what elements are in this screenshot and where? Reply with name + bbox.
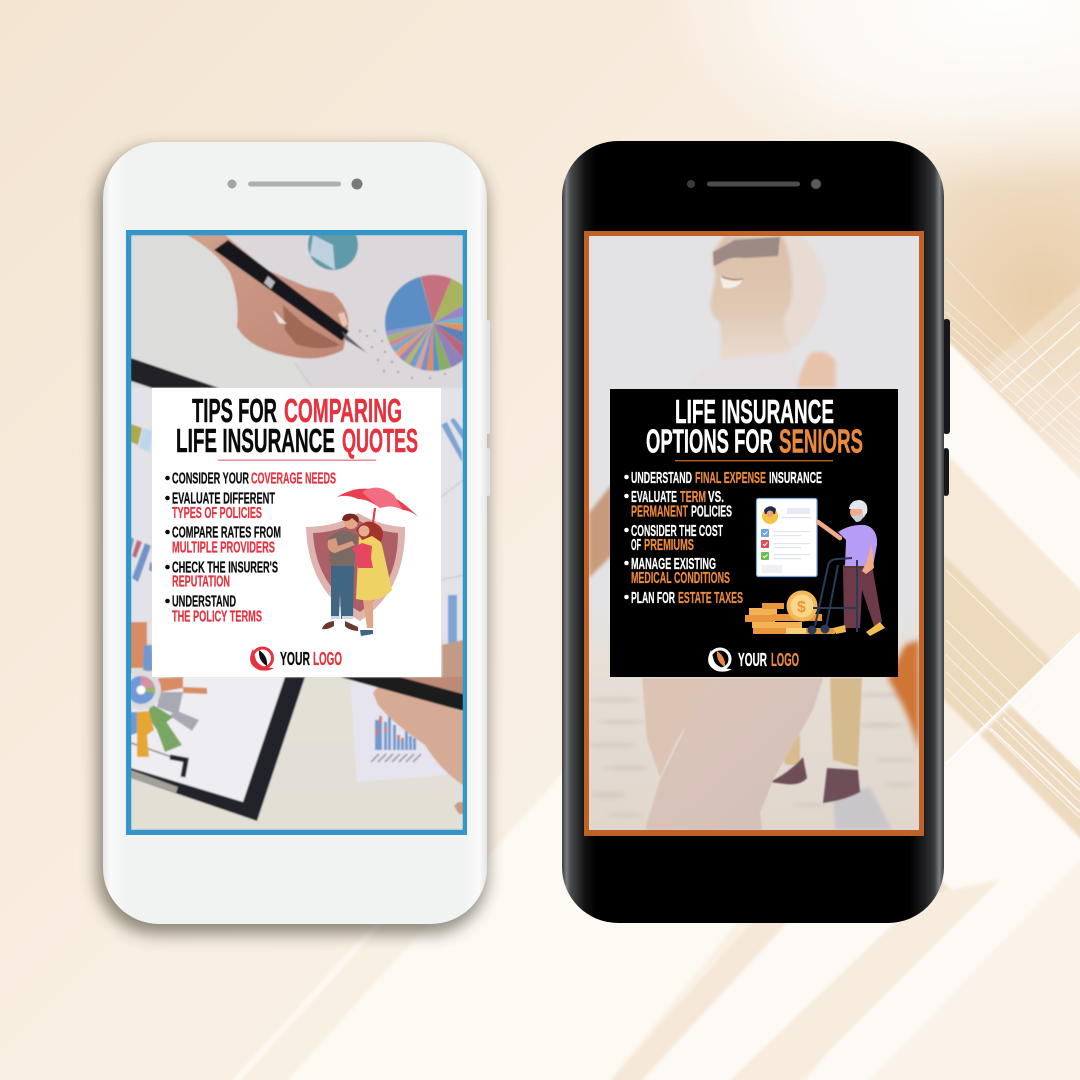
- options list: MEDICAL CONDITIONS: [631, 570, 730, 587]
- sunburst radial chart: [131, 644, 208, 758]
- tips list: THE POLICY TERMS: [172, 608, 262, 626]
- illustration: senior with walker, checklist and coins: [745, 498, 885, 636]
- logo: LOGO: [771, 650, 799, 670]
- small teal pie chart: [307, 235, 359, 271]
- options list: PLAN FOR: [631, 590, 675, 607]
- title: LIFE INSURANCE: [675, 393, 834, 430]
- title: [646, 393, 863, 460]
- card: seniors options: [610, 389, 898, 677]
- phone body: [562, 141, 944, 923]
- side buttons: [486, 320, 490, 496]
- orange blurred sleeve: [888, 640, 919, 752]
- options list: ESTATE TAXES: [678, 590, 743, 607]
- walking frame: [808, 558, 857, 634]
- options list: TERM: [680, 489, 706, 506]
- options list: PERMANENT: [631, 504, 688, 520]
- options list: EVALUATE: [631, 489, 677, 506]
- title: [176, 392, 418, 459]
- tips list: CONSIDER YOUR: [172, 470, 249, 488]
- side buttons: [943, 319, 950, 496]
- tips list: [165, 470, 336, 626]
- second hand with pen: [340, 640, 463, 814]
- photo: desk with charts and hands: [121, 220, 467, 830]
- senior man: [818, 500, 885, 636]
- front camera and speaker: [687, 179, 821, 189]
- coins: $: [797, 599, 806, 616]
- title: COMPARING: [284, 392, 402, 429]
- phone: white mockup: [97, 141, 950, 934]
- tips list: COVERAGE NEEDS: [251, 470, 336, 488]
- senior woman: head, hair and sunglasses: [709, 236, 838, 389]
- title: QUOTES: [342, 422, 418, 459]
- options list: UNDERSTAND: [631, 470, 692, 487]
- options list: PREMIUMS: [644, 537, 694, 554]
- options list: FINAL EXPENSE: [695, 470, 766, 487]
- title: LIFE INSURANCE: [176, 422, 335, 459]
- title: SENIORS: [779, 422, 863, 460]
- large multicolour pie chart: [399, 289, 467, 357]
- checklist card: [756, 498, 817, 576]
- options list: POLICIES: [691, 504, 732, 520]
- sheet with bar chart: [350, 677, 447, 782]
- right strip chart fragments: [441, 418, 463, 645]
- tips list: CHECK THE INSURER'S: [172, 560, 278, 576]
- illustration: family under umbrella and shield: [306, 488, 423, 636]
- logo: YOUR: [738, 650, 767, 670]
- tips list: MULTIPLE PROVIDERS: [172, 540, 275, 556]
- phone: black mockup: [562, 141, 950, 923]
- tips list: COMPARE RATES FROM: [172, 524, 281, 542]
- sand ripples: [592, 693, 910, 816]
- phone shadow: [97, 148, 487, 934]
- tips list: UNDERSTAND: [172, 594, 236, 610]
- options list: CONSIDER THE COST: [631, 523, 723, 540]
- phone body: [103, 142, 487, 924]
- title: TIPS FOR: [192, 392, 277, 429]
- options list: VS.: [708, 489, 724, 506]
- dotted chart labels: [359, 330, 446, 379]
- options list: MANAGE EXISTING: [631, 556, 716, 573]
- title: OPTIONS FOR: [646, 422, 773, 460]
- logo: [250, 648, 342, 671]
- options list: OF: [631, 537, 641, 554]
- hand holding pen: [187, 235, 367, 358]
- arm left of card: [589, 484, 612, 578]
- photo: seniors on the beach: [588, 236, 919, 830]
- tips list: TYPES OF POLICIES: [172, 505, 262, 522]
- options list: INSURANCE: [769, 470, 822, 487]
- clipboard with paper: [131, 677, 305, 821]
- trouser legs: [642, 678, 862, 830]
- screen frame: [584, 231, 924, 836]
- screen frame: [126, 230, 467, 835]
- front camera and speaker: [228, 178, 362, 190]
- logo: YOUR: [280, 649, 310, 669]
- logo: LOGO: [313, 649, 342, 669]
- options list: [624, 470, 822, 607]
- left strip chart fragments: [131, 424, 152, 671]
- card: comparing quotes: [152, 388, 441, 677]
- logo: [708, 649, 799, 672]
- tips list: REPUTATION: [172, 574, 230, 590]
- tips list: EVALUATE DIFFERENT: [172, 490, 275, 508]
